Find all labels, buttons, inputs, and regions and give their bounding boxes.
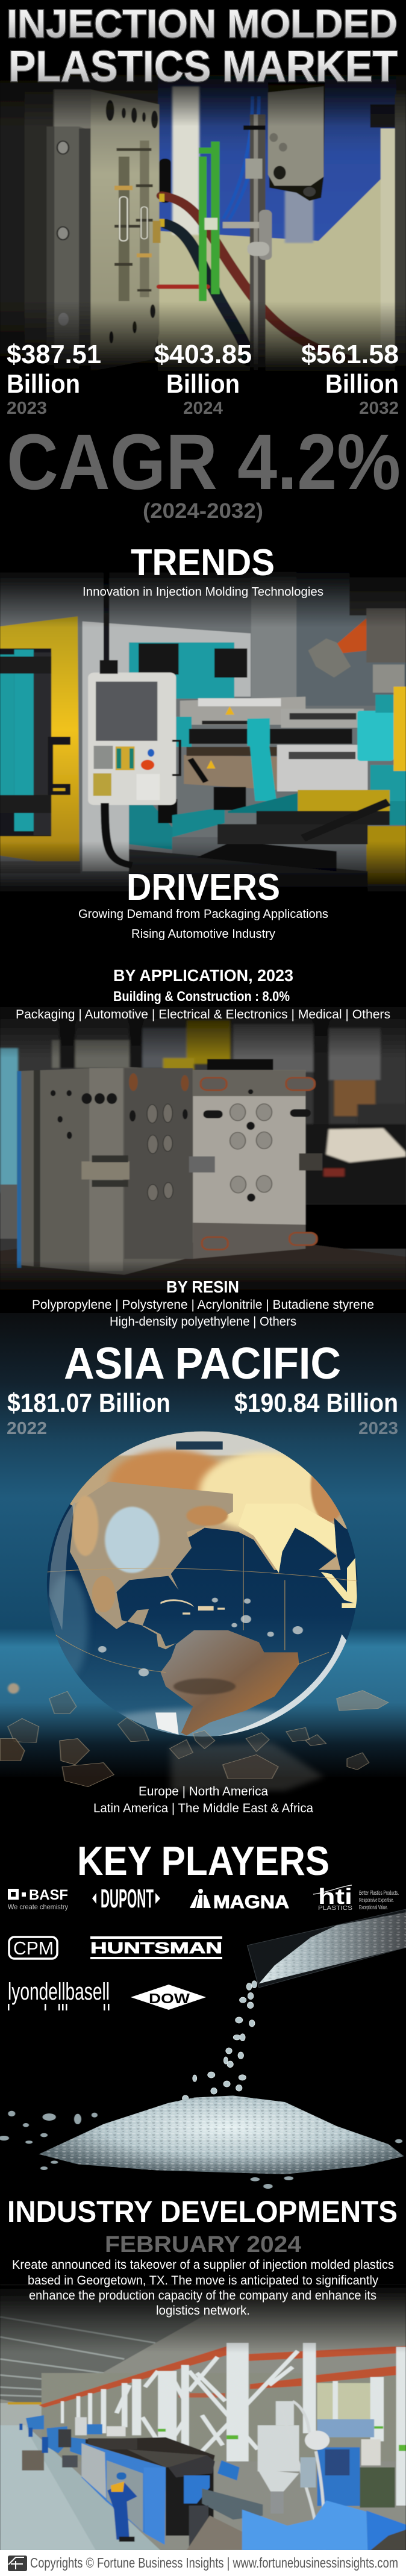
- ceiling: [0, 2284, 259, 2407]
- development date: FEBRUARY 2024: [105, 2232, 301, 2257]
- stat 2024: Billion: [166, 369, 240, 399]
- white column: [83, 622, 251, 872]
- stat 2023: Billion: [7, 369, 80, 399]
- far machines: [26, 2415, 102, 2456]
- development text: logistics network.: [156, 2304, 250, 2318]
- title: INJECTION MOLDED: [7, 1, 398, 46]
- globe body: [44, 1429, 363, 1741]
- regional stats: [7, 1388, 398, 1438]
- other regions: Latin America | The Middle East & Africa: [93, 1801, 313, 1815]
- logo: BASF: We create chemistry: [8, 1903, 68, 1911]
- globe rim: [155, 1712, 179, 1735]
- robot rod and gripper: [223, 83, 325, 373]
- mold plate holes: [58, 100, 158, 343]
- globe grid lines: [47, 1538, 357, 1673]
- by application heading: BY APPLICATION, 2023: [113, 966, 293, 985]
- development text: Kreate announced its takeover of a supplier of injection molded plastics: [12, 2258, 394, 2272]
- stat 2032: [301, 340, 399, 418]
- image fades: [0, 66, 406, 126]
- stat 2023: [7, 340, 101, 418]
- bolts: [57, 141, 69, 240]
- white columns and bracing: [61, 2343, 406, 2506]
- regional stats: $181.07 Billion: [7, 1388, 170, 1418]
- crystals: [0, 1691, 389, 1787]
- mold left half: [17, 1067, 193, 1275]
- heading: trends: TRENDS: [131, 542, 275, 584]
- logo: Huntsman: HUNTSMAN: [90, 1939, 222, 1957]
- teal back plate: [129, 643, 234, 699]
- foreground blue guards: [242, 2501, 367, 2551]
- stat 2024: [154, 340, 252, 418]
- regional stats: 2023: [358, 1419, 398, 1438]
- by resin segments: High-density polyethylene | Others: [110, 1315, 296, 1329]
- heading: key players: KEY PLAYERS: [77, 1838, 329, 1884]
- logo: HTI Plastics: hti: [318, 1884, 352, 1909]
- back wall: [0, 2403, 43, 2426]
- by application highlight: Building & Construction : 8.0%: [113, 988, 290, 1004]
- development text: [12, 2258, 394, 2318]
- mold on floor: [22, 2450, 44, 2471]
- logo: DuPont: [92, 1884, 160, 1913]
- red girders: [39, 2346, 406, 2407]
- land: South America: [161, 1630, 299, 1736]
- green molded part: [199, 142, 220, 301]
- land: Eurasia: [70, 1431, 347, 1591]
- heading: drivers: DRIVERS: [126, 867, 280, 908]
- logo: HTI Plastics: [313, 1884, 399, 1912]
- heading: industry developments: INDUSTRY DEVELOPMENTS: [7, 2195, 398, 2228]
- stat 2023: $387.51: [7, 340, 101, 369]
- mold right half: [193, 1070, 305, 1243]
- footer: [0, 2550, 406, 2576]
- tube: [248, 1909, 406, 1988]
- trends text: Innovation in Injection Molding Technologies: [83, 585, 323, 599]
- by resin segments: Polypropylene | Polystyrene | Acrylonitrile | Butadiene styrene: [32, 1298, 374, 1312]
- logo: Magna: MAGNA: [213, 1891, 289, 1912]
- hoses: [159, 158, 349, 361]
- drivers text: Rising Automotive Industry: [131, 928, 275, 941]
- floor: [0, 2425, 161, 2551]
- image top fade: [0, 2284, 406, 2353]
- CAGR period: (2024-2032): [143, 499, 263, 523]
- logo: Dow: [131, 1985, 206, 2010]
- logo: Dow: DOW: [149, 1991, 190, 2006]
- logo: DuPont: DUPONT: [101, 1884, 154, 1913]
- right bay: [42, 2373, 406, 2462]
- pellet pile: [0, 2095, 404, 2189]
- blue panel: [217, 2460, 240, 2480]
- globe background: [0, 1313, 406, 1777]
- logo: CPM: CPM: [13, 1938, 54, 1959]
- land: North America: [70, 1482, 233, 1649]
- mold cavities and pins: [114, 140, 153, 301]
- globe reflection: [171, 1742, 323, 1791]
- falling pellets: [183, 1981, 257, 2101]
- blue cables: [223, 96, 259, 220]
- dryer hopper: [258, 2401, 299, 2492]
- stat 2024: 2024: [183, 399, 223, 418]
- logo: Magna: [190, 1889, 289, 1912]
- image: mold and robot arm: [0, 66, 406, 373]
- development text: based in Georgetown, TX. The move is anticipated to significantly: [28, 2274, 378, 2288]
- tubing and fan: [283, 2401, 324, 2551]
- logo: LyondellBasell: lyondellbasell: [8, 1979, 110, 2005]
- logo: BASF: [8, 1887, 68, 1911]
- caribbean islands: [161, 1599, 225, 1615]
- stat 2032: $561.58: [301, 340, 399, 369]
- other regions: Europe | North America: [139, 1785, 268, 1798]
- market size stats: [7, 340, 399, 418]
- globe: [0, 1429, 389, 1791]
- drivers text: [78, 908, 328, 941]
- worker: [107, 2472, 137, 2542]
- blue chiller and right machines: [317, 2419, 374, 2437]
- image fades: [0, 1000, 406, 1058]
- stat 2032: Billion: [325, 369, 399, 399]
- pellets in tube: [259, 1912, 406, 1983]
- regional stats: 2022: [7, 1419, 47, 1438]
- other regions: [93, 1785, 313, 1815]
- holes and ejector pins: [51, 1073, 311, 1202]
- drivers text: Growing Demand from Packaging Applications: [78, 908, 328, 921]
- title: [7, 1, 398, 91]
- logo: HTI Plastics: PLASTICS: [318, 1905, 352, 1912]
- yellow door: [0, 616, 80, 868]
- logo: Huntsman: [90, 1936, 222, 1959]
- distant workers: [19, 2424, 48, 2453]
- by resin heading: BY RESIN: [166, 1277, 239, 1296]
- development text: enhance the production capacity of the company and enhance its: [29, 2289, 376, 2303]
- stat 2024: $403.85: [154, 340, 252, 369]
- guide pins: [201, 1077, 317, 1250]
- stat 2023: 2023: [7, 399, 47, 418]
- image fades: [0, 569, 406, 628]
- heading: Asia Pacific: ASIA PACIFIC: [64, 1338, 341, 1388]
- injection unit: [180, 697, 305, 725]
- bokeh lights: [98, 1598, 303, 1676]
- stat 2032: 2032: [359, 399, 399, 418]
- main injection machine: [81, 2437, 263, 2551]
- image: plastic pellets pouring from tube: [0, 1909, 406, 2189]
- by resin segments: [32, 1298, 374, 1329]
- image: factory floor: [0, 2284, 406, 2551]
- icon: Fortune Business Insights logo: [8, 2556, 27, 2571]
- lower machine base: [129, 805, 172, 850]
- logo: BASF: BASF: [29, 1887, 68, 1903]
- by application segments: Packaging | Automotive | Electrical & Electronics | Medical | Others: [16, 1008, 390, 1021]
- control panel: [88, 673, 176, 805]
- image: mold block: [0, 1000, 406, 1295]
- image: injection molding machine: [0, 569, 406, 894]
